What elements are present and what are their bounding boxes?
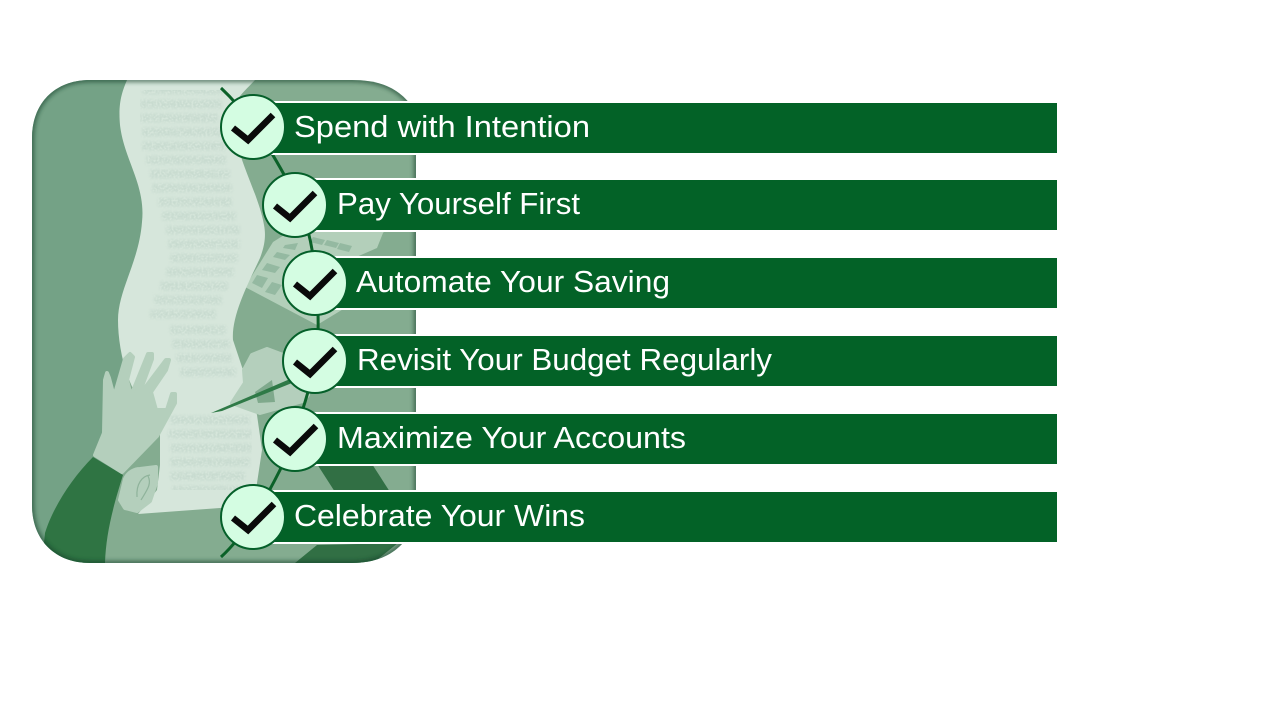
dark sleeve of right arm — [318, 466, 389, 490]
infographic canvas — [32, 80, 1057, 563]
ear or elbow shape — [120, 467, 156, 511]
curved connector line — [221, 88, 318, 557]
label 6: Celebrate Your Wins — [294, 498, 585, 533]
item 5: Maximize Your Accounts — [295, 413, 1058, 465]
item 4: Revisit Your Budget Regularly — [315, 335, 1058, 387]
icon: check circle 3 — [283, 251, 347, 315]
item 1: Spend with Intention — [253, 102, 1058, 154]
right hand holding pen — [232, 349, 308, 413]
icon: check circle 5 — [263, 407, 327, 471]
label 1: Spend with Intention — [294, 109, 590, 144]
illustration panel: hands writing on a long receipt — [32, 80, 416, 563]
sleeve of left arm — [42, 457, 123, 563]
dark lower-right shape — [295, 543, 398, 563]
background of illustration — [32, 80, 416, 563]
label 4: Revisit Your Budget Regularly — [357, 342, 772, 377]
receipt text lines — [140, 90, 252, 490]
receipt paper — [118, 80, 265, 514]
calculator — [246, 232, 384, 325]
label 5: Maximize Your Accounts — [337, 420, 686, 455]
bar 5 — [295, 413, 1058, 465]
item 3: Automate Your Saving — [315, 257, 1058, 309]
icon: check circle 1 — [221, 95, 285, 159]
inner shadow edge — [32, 80, 416, 563]
label 3: Automate Your Saving — [356, 264, 670, 299]
item 2: Pay Yourself First — [295, 179, 1058, 231]
icon: check circle 6 — [221, 485, 285, 549]
bar 4 — [315, 335, 1058, 387]
label 2: Pay Yourself First — [337, 186, 580, 221]
icon: check circle 4 — [283, 329, 347, 393]
bar 1 — [253, 102, 1058, 154]
bar 3 — [315, 257, 1058, 309]
bar 6 — [253, 491, 1058, 543]
item 6: Celebrate Your Wins — [253, 491, 1058, 543]
pen — [211, 379, 292, 413]
left hand — [95, 354, 175, 472]
bar 2 — [295, 179, 1058, 231]
icon: check circle 2 — [263, 173, 327, 237]
